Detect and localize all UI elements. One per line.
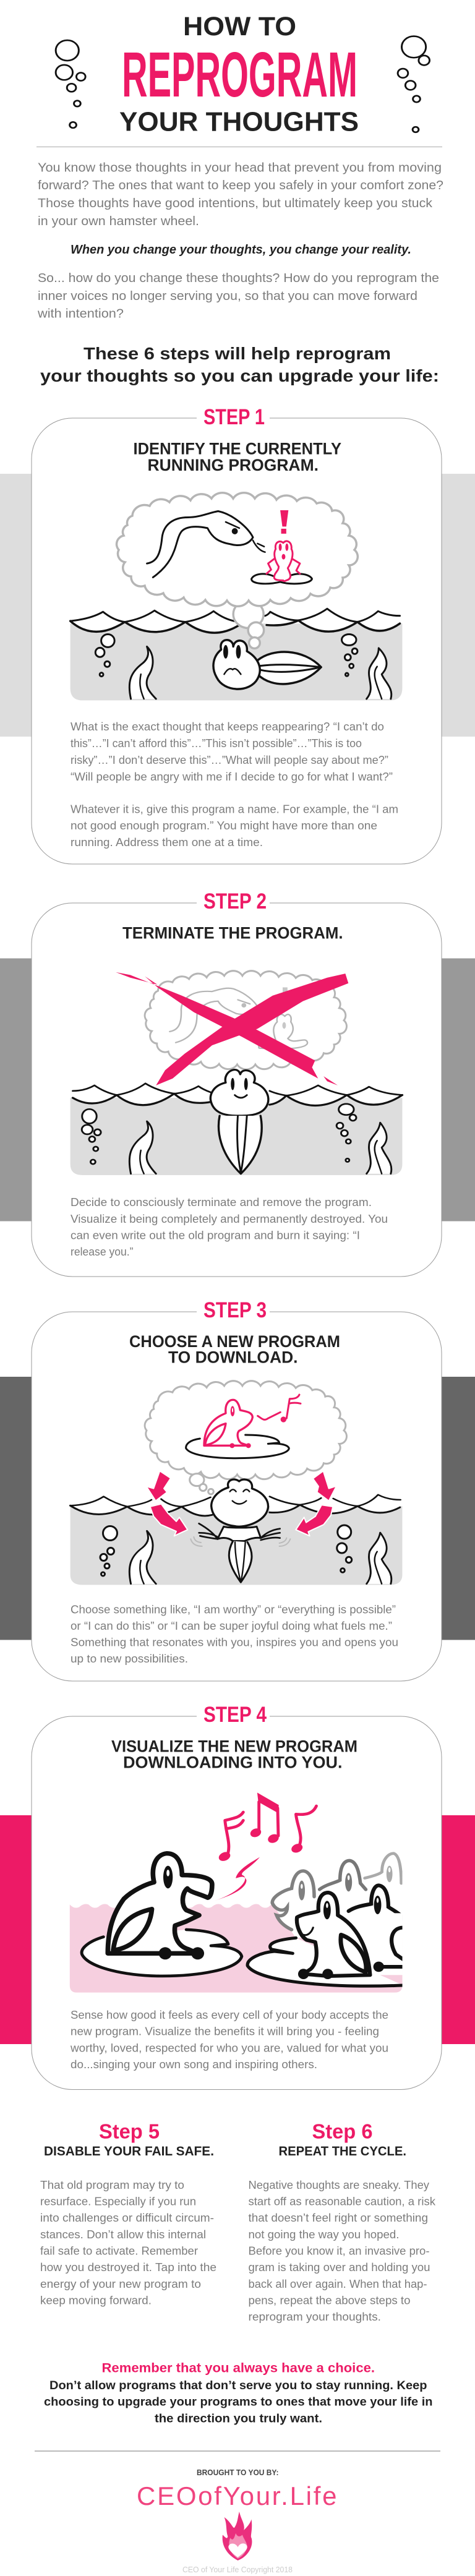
- step 4 body text: Sense how good it feels as every cell of your body accepts the: [71, 2009, 388, 2021]
- intro paragraph: Those thoughts have good intentions, but ultimately keep you stuck: [38, 196, 433, 210]
- step 6 body text: pens, repeat the above steps to: [249, 2295, 411, 2307]
- step 6 body text: that doesn’t feel right or something: [249, 2212, 428, 2224]
- panel: step 1: [32, 405, 442, 864]
- step 4 body text: new program. Visualize the benefits it will bring you - feeling: [71, 2026, 379, 2038]
- step 1 label: STEP 1: [203, 405, 265, 429]
- illustration: crossed-out thought and tadpole: [71, 971, 402, 1175]
- step 4 heading: DOWNLOADING INTO YOU.: [123, 1753, 343, 1772]
- step 1 heading: RUNNING PROGRAM.: [147, 456, 319, 474]
- illustration: new program thought: [71, 1381, 402, 1585]
- arrows: download into tadpole: [147, 1471, 336, 1536]
- step 1 body text: not good enough program.” You might have more than one: [71, 819, 377, 832]
- illustration: singing frogs: [70, 1792, 403, 1993]
- step 2 body text: Decide to consciously terminate and remove the program.: [71, 1196, 372, 1209]
- step 3 heading: TO DOWNLOAD.: [168, 1348, 298, 1367]
- step 4 heading: VISUALIZE THE NEW PROGRAM: [111, 1737, 357, 1756]
- step 6 column: [249, 2120, 436, 2323]
- step 1 body text: “Will people be angry with me if I decide to go for what I want?”: [71, 771, 393, 783]
- closing callout: the direction you truly want.: [155, 2412, 322, 2426]
- step 5 body text: That old program may try to: [40, 2179, 184, 2191]
- step 6 body text: [249, 2179, 436, 2323]
- step 2 label: STEP 2: [203, 889, 267, 914]
- step 2 body text: release you.”: [71, 1246, 134, 1258]
- step 1 body text: this”…”I can’t afford this”…”This isn’t possible”…”This is too: [71, 737, 362, 750]
- step 6 heading: REPEAT THE CYCLE.: [278, 2144, 406, 2159]
- step 3 body text: [71, 1603, 398, 1665]
- band: step 2 background: [0, 959, 475, 1221]
- step 5 body text: [40, 2179, 216, 2307]
- step 6 body text: not going the way you hoped.: [249, 2228, 400, 2241]
- band: step 1 background: [0, 474, 475, 737]
- key statement: When you change your thoughts, you change your reality.: [71, 242, 411, 257]
- step 6 body text: reprogram your thoughts.: [249, 2311, 381, 2323]
- panel: step 4: [32, 1703, 442, 2089]
- closing callout: Don’t allow programs that don’t serve you to stay running. Keep: [49, 2379, 427, 2392]
- step 5 column: [40, 2120, 216, 2307]
- step 5 body text: fail safe to activate. Remember: [40, 2245, 198, 2257]
- icon: right thought bubbles: [398, 36, 430, 132]
- title: [119, 12, 359, 137]
- illustration: tadpole thinking of snake: [71, 493, 402, 700]
- step 4 label: STEP 4: [203, 1703, 267, 1727]
- step 3 heading: [129, 1332, 340, 1367]
- step 1 body text: What is the exact thought that keeps reappearing? “I can’t do: [71, 721, 384, 733]
- step 5 body text: resurface. Especially if you run: [40, 2196, 196, 2208]
- intro paragraph: [38, 161, 443, 228]
- intro paragraph: forward? The ones that want to keep you safely in your comfort zone?: [38, 178, 443, 192]
- step 5 body text: stances. Don’t allow this internal: [40, 2228, 206, 2241]
- closing callout: Remember that you always have a choice.: [101, 2361, 375, 2375]
- section heading: [40, 344, 439, 385]
- music notes: [214, 1792, 316, 1901]
- step 5 label: Step 5: [99, 2120, 160, 2142]
- step 2 heading: TERMINATE THE PROGRAM.: [122, 924, 343, 943]
- step 1 body text: risky”…”I don’t deserve this”…”What will people say about me?”: [71, 754, 388, 766]
- step 6 body text: back all over again. When that hap-: [249, 2278, 427, 2290]
- step 5 body text: energy of your new program to: [40, 2278, 201, 2290]
- step 3 body text: Something that resonates with you, inspires you and opens you: [71, 1637, 398, 1649]
- step 6 body text: start off as reasonable caution, a risk: [249, 2196, 436, 2208]
- panel: step 3: [32, 1298, 442, 1681]
- step 1 body text: running. Address them one at a time.: [71, 836, 263, 849]
- step 3 heading: CHOOSE A NEW PROGRAM: [129, 1332, 340, 1351]
- band: step 3 background: [0, 1377, 475, 1640]
- section heading: These 6 steps will help reprogram: [83, 344, 391, 363]
- step 5 body text: keep moving forward.: [40, 2295, 152, 2307]
- panel: step 2: [32, 889, 442, 1277]
- step 4 body text: [70, 2009, 388, 2071]
- footer: copyright: CEO of Your Life Copyright 2018: [182, 2565, 293, 2574]
- step 6 body text: gram is taking over and holding you: [249, 2261, 430, 2274]
- step 4 heading: [111, 1737, 357, 1772]
- step 3 body text: or “I can do this” or “I can be super joyful doing what fuels me.”: [71, 1620, 392, 1632]
- step 3 body text: Choose something like, “I am worthy” or “everything is possible”: [71, 1603, 396, 1615]
- icon: flame with heart: [223, 2512, 252, 2561]
- step 5 heading: DISABLE YOUR FAIL SAFE.: [44, 2144, 214, 2159]
- step 4 body text: do...singing your own song and inspiring others.: [71, 2058, 317, 2071]
- question paragraph: with intention?: [37, 307, 124, 320]
- step 5 body text: into challenges or difficult circum-: [40, 2212, 214, 2224]
- question paragraph: inner voices no longer serving you, so that you can move forward: [38, 289, 417, 303]
- question paragraph: [37, 271, 439, 320]
- band: step 4 background: [0, 1815, 475, 2044]
- step 3 label: STEP 3: [203, 1298, 267, 1322]
- step 3 body text: up to new possibilities.: [71, 1653, 188, 1665]
- closing callout: choosing to upgrade your programs to ones that move your life in: [44, 2395, 433, 2409]
- closing callout: [44, 2361, 433, 2426]
- step 1 body text: [71, 721, 398, 849]
- icon: left thought bubbles: [56, 40, 85, 128]
- step 4 body text: worthy, loved, respected for who you are, valued for what you: [70, 2042, 388, 2055]
- footer: credit: BROUGHT TO YOU BY:: [197, 2468, 278, 2477]
- step 6 label: Step 6: [312, 2120, 372, 2142]
- section heading: your thoughts so you can upgrade your life:: [40, 366, 439, 385]
- footer: credit: [137, 2468, 336, 2510]
- step 6 body text: Before you know it, an invasive pro-: [249, 2245, 429, 2257]
- intro paragraph: You know those thoughts in your head that prevent you from moving: [38, 161, 442, 174]
- step 2 body text: Visualize it being completely and permanently destroyed. You: [71, 1213, 388, 1225]
- step 6 body text: Negative thoughts are sneaky. They: [249, 2179, 429, 2191]
- step 2 body text: can even write out the old program and burn it saying: “I: [71, 1230, 360, 1242]
- title: HOW TO: [183, 12, 296, 41]
- step 1 heading: [134, 439, 341, 474]
- step 2 body text: [71, 1196, 388, 1258]
- footer: credit: CEOofYour.Life: [137, 2481, 336, 2510]
- question paragraph: So... how do you change these thoughts? How do you reprogram the: [38, 271, 439, 285]
- intro paragraph: in your own hamster wheel.: [38, 214, 199, 228]
- step 1 body text: Whatever it is, give this program a name. For example, the “I am: [71, 803, 398, 815]
- title: YOUR THOUGHTS: [119, 106, 359, 137]
- step 5 body text: how you destroyed it. Tap into the: [40, 2261, 216, 2274]
- step 1 heading: IDENTIFY THE CURRENTLY: [134, 439, 341, 458]
